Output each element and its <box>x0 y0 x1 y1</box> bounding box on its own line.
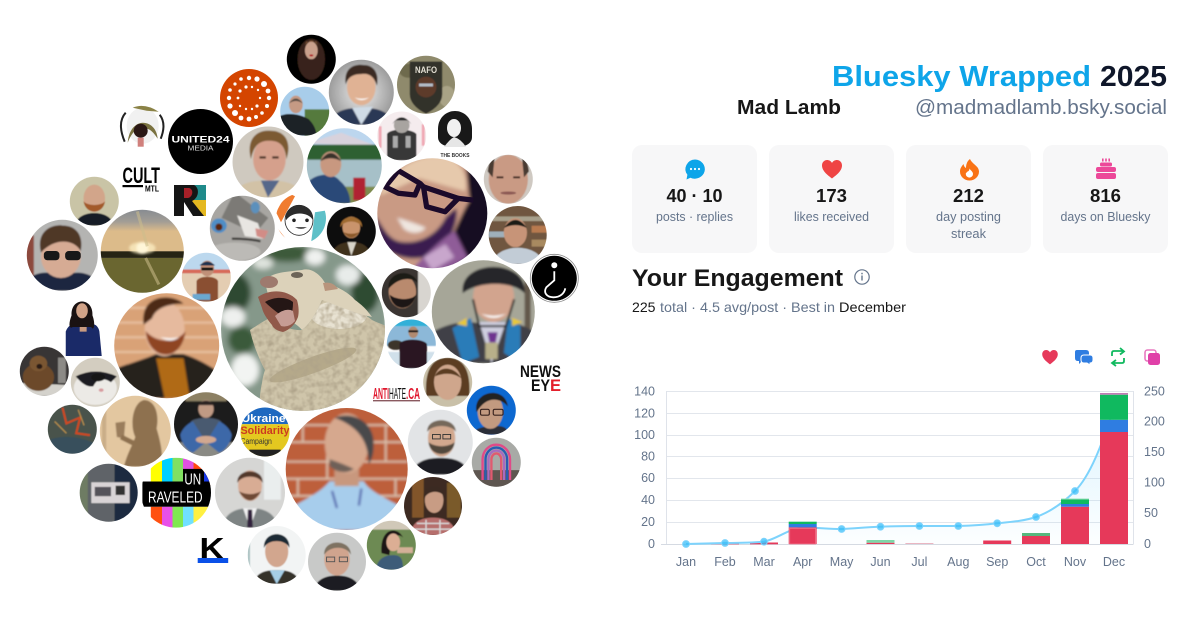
month labels: Oct <box>1026 555 1046 569</box>
avatar: orange dotted ring logo <box>220 69 278 127</box>
cumulative area <box>686 407 1114 544</box>
icon: likes <box>1042 350 1058 364</box>
avatar: dragon artwork <box>48 404 97 454</box>
avatar: poster on a pole <box>80 464 138 522</box>
avatar: blond man on dark background <box>326 206 376 256</box>
logo: News Eye <box>520 363 561 395</box>
engagement summary: 225 <box>632 299 656 315</box>
avatar: snarling sheep <box>218 244 388 419</box>
icon: flame <box>960 159 979 180</box>
avatar: man in blue shirt and blazer <box>248 526 306 584</box>
avatar: bearded man with dark hair <box>382 268 431 318</box>
left axis labels: 80 <box>641 450 655 464</box>
panel: stat days on Bluesky: days on Bluesky <box>1060 209 1151 224</box>
icon: reposts <box>1112 348 1124 366</box>
month labels: May <box>830 555 854 569</box>
handle: @madmadlamb.bsky.social <box>915 97 1167 119</box>
avatar: man in plaid shirt <box>404 477 462 535</box>
left axis labels: 60 <box>641 471 655 485</box>
avatar: Unraveled logo with test-card bars: RAVELED <box>148 490 203 507</box>
avatar: sketched soldier <box>377 112 426 160</box>
logo: News Eye: EY <box>531 377 550 395</box>
avatar: grizzly bear <box>20 346 69 396</box>
icon: cake <box>1096 158 1116 179</box>
avatar: UNITED24 Media logo: UNITED24 <box>171 134 230 144</box>
month labels: Nov <box>1064 555 1087 569</box>
icon: chat bubble <box>685 160 705 180</box>
panel: stat streak: day posting <box>936 209 1001 224</box>
avatar: Unraveled logo with test-card bars <box>142 458 211 528</box>
logo: Cult MTL: MTL <box>145 184 159 194</box>
right axis labels: 150 <box>1144 445 1165 459</box>
avatar: woman in blue blazer <box>66 301 102 356</box>
left axis labels: 140 <box>634 384 655 398</box>
avatar: red-bearded man at brick wall <box>114 293 220 398</box>
avatar: NAFO patch <box>397 56 455 114</box>
avatar: classical bust illustration <box>438 111 472 159</box>
chart: monthly engagement with cumulative line <box>634 384 1165 569</box>
avatar: man with lanyard at brick wall <box>286 408 408 530</box>
line markers <box>683 488 1078 547</box>
avatar: Ukraine Solidarity Campaign: Solidarity <box>240 425 290 437</box>
logo: Antihate.ca: ANTI <box>373 386 389 403</box>
logo: K: K <box>200 531 225 566</box>
left axis labels: 40 <box>641 493 655 507</box>
avatar: man with sunglasses <box>26 220 98 291</box>
heading: your engagement: Your Engagement <box>632 265 843 292</box>
left axis labels <box>634 384 655 551</box>
avatar: smiling bearded man with glasses <box>377 158 488 268</box>
avatar: classical bust illustration: THE BOOKS <box>440 153 470 159</box>
right axis labels: 200 <box>1144 414 1165 428</box>
small bars: Feb and Mar <box>711 542 778 544</box>
month labels: Feb <box>714 555 736 569</box>
avatar: man in suit <box>328 60 394 125</box>
logo: Cult MTL <box>122 163 160 194</box>
avatar: black and white cat <box>70 358 120 407</box>
avatar: dark-haired woman <box>286 34 336 84</box>
engagement summary: total · 4.5 avg/post · Best in <box>660 299 835 315</box>
logo: Antihate.ca: .CA <box>406 386 420 403</box>
avatar: UNITED24 Media logo <box>168 109 233 174</box>
avatar: Ukraine Solidarity Campaign <box>240 408 290 456</box>
logo: News Eye: E <box>550 377 561 395</box>
engagement summary <box>632 299 906 315</box>
logo: Antihate.ca: HATE <box>389 386 406 403</box>
panel: stat days on Bluesky: 816 <box>1090 185 1121 206</box>
right axis labels: 50 <box>1144 506 1158 520</box>
avatar: sunset over field <box>100 210 184 293</box>
left axis labels: 120 <box>634 406 655 420</box>
avatar: UNITED24 Media logo: MEDIA <box>188 146 214 152</box>
avatar: blue-eyed cat <box>210 196 275 261</box>
avatar: balding man <box>484 154 533 204</box>
panel: stat likes: 173 <box>816 185 847 206</box>
month labels: Dec <box>1103 555 1125 569</box>
avatar: moustache dog sticker <box>121 106 163 147</box>
avatar: cleric in helmet <box>432 260 535 364</box>
right axis labels: 100 <box>1144 476 1165 490</box>
avatar: beach woman with cap <box>182 252 231 302</box>
chart legend <box>1042 348 1160 366</box>
avatar: woman with brown bob <box>423 358 472 407</box>
month labels: Jun <box>870 555 891 569</box>
avatar: man with glasses on blue <box>466 386 516 435</box>
avatar: question hook logo <box>530 254 578 302</box>
panel: stat posts and replies: 40 · 10 <box>666 185 722 206</box>
panel: stat days on Bluesky <box>1043 145 1168 253</box>
left axis labels: 0 <box>648 537 655 551</box>
avatar: rainbow arch sculpture <box>472 438 521 487</box>
avatar: Unraveled logo with test-card bars: UN <box>184 471 201 488</box>
cumulative line <box>686 407 1114 544</box>
avatar: Ukraine Solidarity Campaign: Ukraine <box>241 413 286 425</box>
avatar: curly-haired man in blazer <box>232 126 304 198</box>
avatar: man outdoors by lake <box>280 86 330 136</box>
avatar: grey-bearded man in black <box>408 410 473 475</box>
engagement summary: December <box>839 299 906 315</box>
avatar: cartoon face <box>276 195 326 242</box>
icon: replies <box>1075 350 1093 365</box>
left axis labels: 20 <box>641 515 655 529</box>
month labels: Mar <box>753 555 775 569</box>
month labels: Apr <box>793 555 812 569</box>
panel: stat posts and replies: posts · replies <box>656 209 733 224</box>
avatar: bald red-bearded man <box>70 176 119 226</box>
avatar: shadow of woman with cup <box>100 396 171 467</box>
month labels: Aug <box>947 555 969 569</box>
panel: stat streak: 212 <box>953 185 984 206</box>
month labels: Jul <box>911 555 927 569</box>
avatar: older man with glasses <box>302 527 372 596</box>
month labels: Sep <box>986 555 1008 569</box>
logo: Cult MTL: CULT <box>122 163 160 188</box>
month labels: Jan <box>676 555 696 569</box>
logo: R mark <box>173 184 206 217</box>
right axis labels: 250 <box>1144 384 1165 398</box>
month labels <box>676 555 1125 569</box>
icon: heart <box>822 160 842 178</box>
avatar: NAFO patch: NAFO <box>415 65 437 75</box>
avatar: Ukraine Solidarity Campaign: Campaign <box>240 437 272 446</box>
avatar: man in front of bookshelf <box>488 206 547 264</box>
avatar: man in grey suit <box>215 458 285 528</box>
avatar bubble cluster <box>15 30 578 596</box>
logo: News Eye: NEWS <box>520 363 561 381</box>
panel: stat streak: streak <box>951 226 986 241</box>
panel: stat streak <box>906 145 1031 253</box>
panel: stat posts and replies <box>632 145 757 253</box>
icon: info <box>855 270 869 284</box>
left axis labels: 100 <box>634 428 655 442</box>
title: Bluesky Wrapped <box>832 61 1091 93</box>
display name: Mad Lamb <box>737 97 841 119</box>
title: 2025 <box>1100 61 1167 93</box>
avatar: man sitting on steps <box>174 392 238 456</box>
avatar: man with scarf on shore <box>386 320 436 368</box>
right axis labels: 0 <box>1144 537 1151 551</box>
panel: stat likes: likes received <box>794 209 869 224</box>
icon: quotes <box>1145 350 1160 365</box>
panel: stat likes <box>769 145 894 253</box>
avatar: man with mountain and lake <box>306 128 382 204</box>
avatar: woman in denim jacket, landscape <box>362 516 421 575</box>
right axis labels <box>1144 384 1165 551</box>
stacked bars <box>789 393 1128 544</box>
